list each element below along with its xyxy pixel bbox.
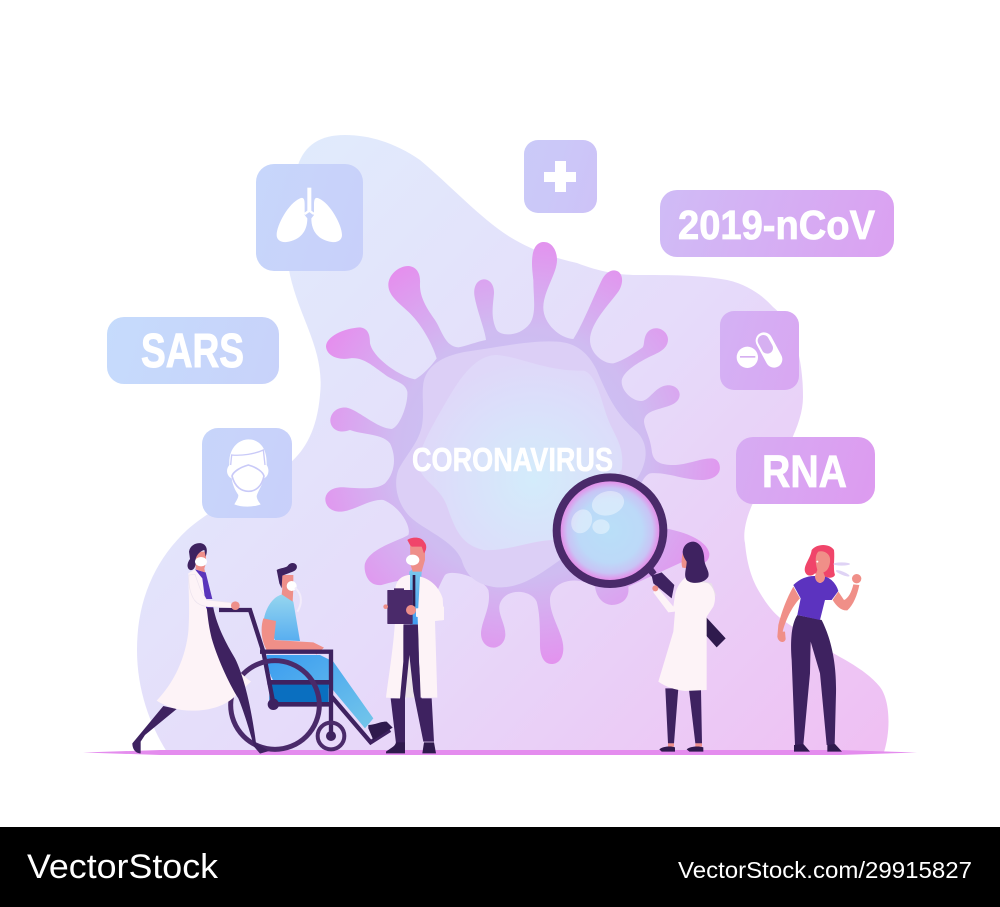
tag: RNA: RNA (762, 446, 847, 497)
person: woman doctor with magnifier (646, 542, 726, 752)
patient torso (264, 594, 300, 641)
person: male doctor with clipboard (383, 538, 444, 753)
patient legs (267, 655, 373, 728)
footer bar: VectorStock.com/29915827 (678, 857, 972, 883)
coronavirus illustration (325, 242, 720, 664)
tag: 2019-nCoV (660, 190, 894, 257)
person: woman doctor pushing wheelchair (132, 543, 269, 754)
tag: SARS (107, 317, 279, 384)
tag: RNA (736, 437, 875, 504)
icon: lungs (256, 164, 363, 271)
frame (219, 610, 390, 742)
tag: 2019-nCoV: 2019-nCoV (678, 202, 876, 248)
big wheel (231, 661, 319, 749)
icon: pills (720, 311, 799, 390)
small wheel (318, 723, 344, 749)
magnifying glass (557, 477, 663, 584)
footer bar (0, 827, 1000, 907)
wheelchair with patient (219, 563, 393, 749)
title: CORONAVIRUS: CORONAVIRUS (412, 441, 613, 478)
background blob (137, 135, 889, 752)
seat (269, 684, 329, 702)
icon: medical plus (524, 140, 597, 213)
footer bar: VectorStock (27, 848, 219, 886)
icon: face with mask (202, 428, 292, 518)
patient head (281, 575, 293, 602)
person: coughing woman (777, 545, 861, 752)
tag: SARS: SARS (141, 325, 244, 378)
shoe (368, 722, 393, 740)
ground line (83, 750, 917, 755)
